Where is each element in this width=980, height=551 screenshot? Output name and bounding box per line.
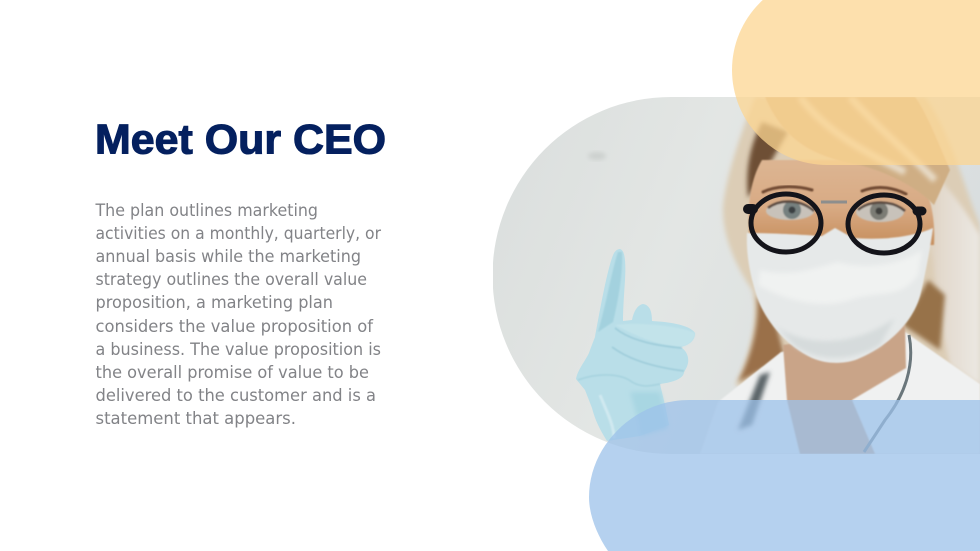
face [748,160,934,245]
blue glove [576,249,695,441]
body paragraph: The plan outlines marketing [95,201,318,220]
body paragraph: considers the value proposition of [96,317,374,336]
face mask [747,228,933,363]
eyes [766,201,905,222]
body paragraph: proposition, a marketing plan [96,293,333,312]
body paragraph: statement that appears. [96,409,296,428]
body paragraph [95,201,381,428]
hair [723,97,980,400]
blue pill shape [589,400,980,551]
stethoscope [864,335,911,452]
lab coat [721,332,980,429]
body paragraph: annual basis while the marketing [96,247,361,266]
eyebrows [763,187,906,194]
blond fringe [765,97,950,205]
title: Meet Our CEO [95,116,386,162]
body paragraph: delivered to the customer and is a [96,386,376,405]
body paragraph: the overall promise of value to be [96,363,369,382]
body paragraph: strategy outlines the overall value [96,270,367,289]
glasses [748,194,922,253]
yellow pill shape [732,0,980,165]
photo: CEO in medical mask [493,97,980,454]
neck [783,325,906,454]
body paragraph: a business. The value proposition is [96,340,381,359]
body paragraph: activities on a monthly, quarterly, or [96,224,381,243]
